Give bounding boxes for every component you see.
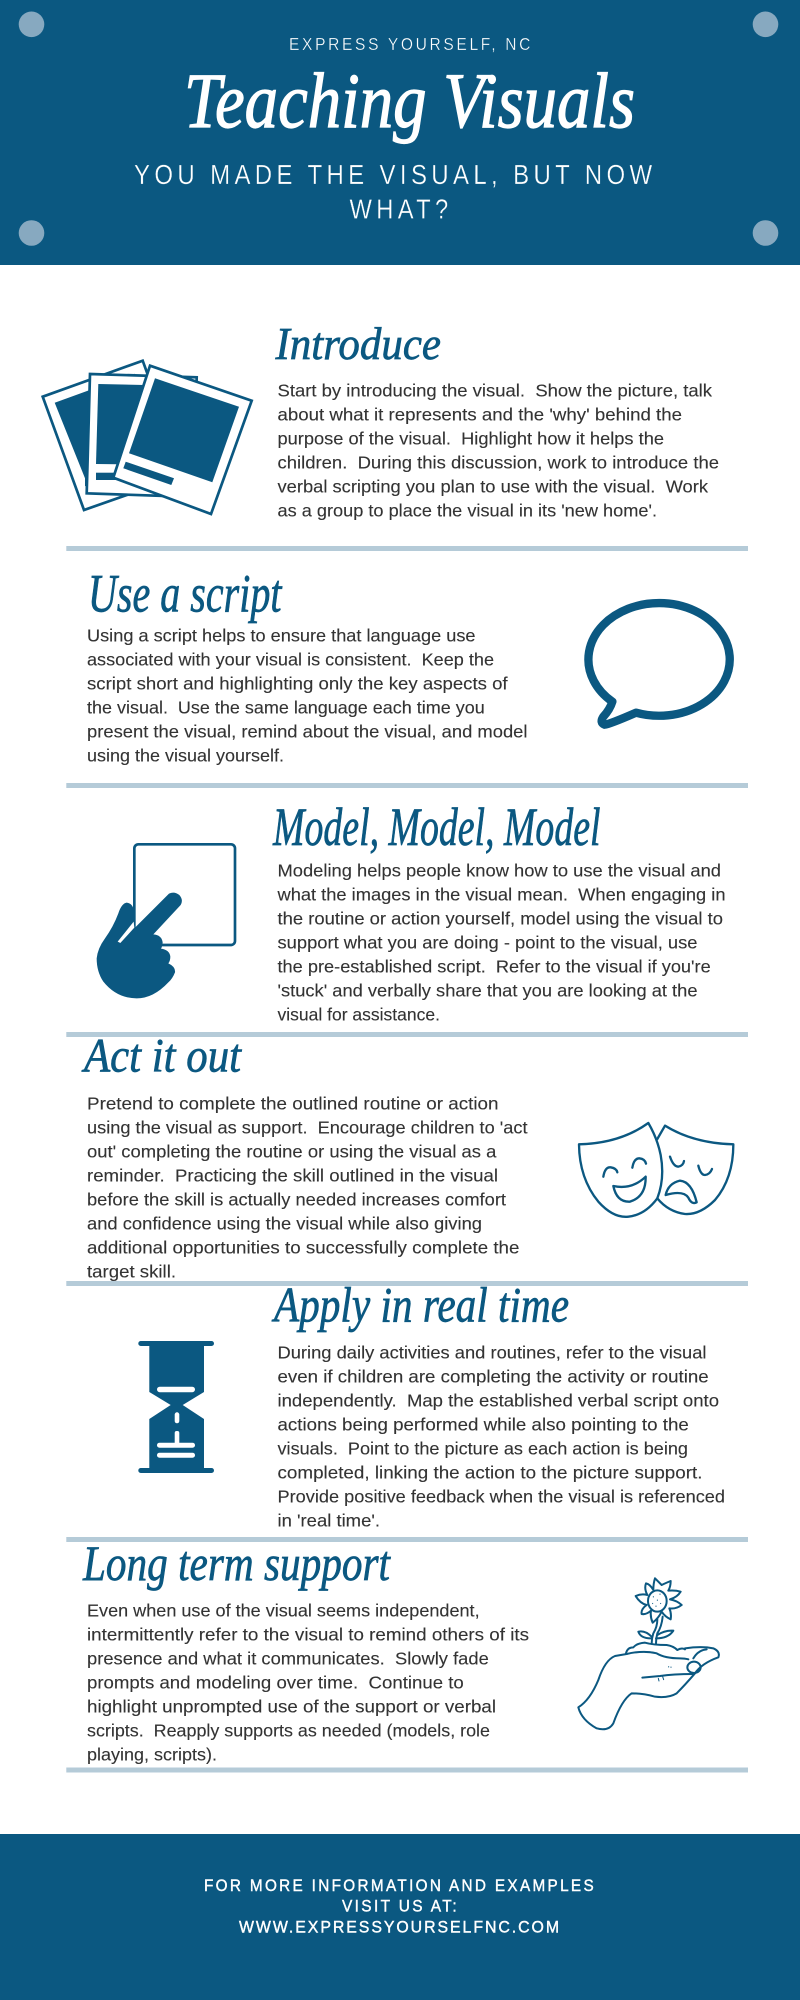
text block: model: visual for assistance. (278, 1004, 440, 1024)
text block: introduce: verbal scripting you plan to use with the visual. Work (278, 477, 708, 497)
text block: apply in real time: independently. Map the established verbal script onto (278, 1390, 719, 1410)
text block: apply in real time: even if children are completing the activity or routine (278, 1366, 709, 1386)
title: Teaching Visuals (184, 57, 635, 144)
text block: act it out: using the visual as support. Encourage children to 'act (87, 1117, 528, 1137)
text block: act it out: Pretend to complete the outlined routine or action (87, 1093, 498, 1113)
text block: use a script: script short and highlighting only the key aspects of (87, 674, 508, 694)
footer text: WWW.EXPRESSYOURSELFNC.COM (239, 1919, 561, 1937)
text block: apply in real time: in 'real time'. (278, 1510, 380, 1530)
text block: introduce: as a group to place the visual in its 'new home'. (278, 501, 657, 521)
footer text (204, 1877, 596, 1937)
icon: hourglass (138, 1341, 214, 1473)
panel: footer (0, 1834, 800, 2000)
heading: long term support: Long term support (82, 1535, 391, 1591)
icon: hand holding flower (578, 1578, 719, 1729)
text block: long term support: scripts. Reapply supports as needed (models, role (87, 1720, 490, 1740)
icon: speech bubble (588, 603, 730, 725)
text block: apply in real time (278, 1342, 725, 1530)
text block: long term support: Even when use of the visual seems independent, (87, 1600, 480, 1620)
text block: apply in real time: visuals. Point to the picture as each action is being (278, 1438, 688, 1458)
text block: long term support (87, 1600, 529, 1764)
panel: long term support (82, 1535, 719, 1764)
text block: model: the routine or action yourself, model using the visual to (278, 908, 723, 928)
text block: use a script: present the visual, remind about the visual, and model (87, 722, 528, 742)
text block: introduce: Start by introducing the visual. Show the picture, talk (278, 380, 712, 400)
heading: introduce: Introduce (275, 318, 441, 369)
panel: apply in real time (138, 1277, 725, 1530)
text block: model: 'stuck' and verbally share that you are looking at the (278, 980, 698, 1000)
text block: apply in real time: Provide positive feedback when the visual is referenced (278, 1486, 725, 1506)
heading: apply in real time: Apply in real time (272, 1277, 569, 1333)
footer text: VISIT US AT: (342, 1898, 459, 1916)
text block: apply in real time: completed, linking the action to the picture support. (278, 1462, 702, 1482)
text block: use a script: the visual. Use the same language each time you (87, 698, 485, 718)
panel: act it out (81, 1030, 733, 1281)
text block: model: the pre-established script. Refer to the visual if you're (278, 956, 711, 976)
text block: long term support: presence and what it communicates. Slowly fade (87, 1648, 489, 1668)
icon: theatre masks (579, 1123, 733, 1217)
text block: act it out: target skill. (87, 1261, 176, 1281)
panel: use a script (87, 564, 730, 766)
subtitle (134, 159, 656, 225)
text block: long term support: playing, scripts). (87, 1744, 217, 1764)
text block: introduce: purpose of the visual. Highlight how it helps the (278, 429, 664, 449)
organisation name: EXPRESS YOURSELF, NC (289, 34, 533, 54)
heading: act it out: Act it out (81, 1030, 242, 1083)
text block: act it out: additional opportunities to successfully complete the (87, 1237, 519, 1257)
panel: introduce (43, 318, 719, 521)
icon: stack of photos (43, 361, 252, 514)
text block: apply in real time: actions being performed while also pointing to the (278, 1414, 689, 1434)
panel: model (97, 797, 725, 1024)
text block: long term support: prompts and modeling over time. Continue to (87, 1672, 464, 1692)
text block: long term support: intermittently refer to the visual to remind others of its (87, 1624, 529, 1644)
text block: act it out (87, 1093, 528, 1281)
text block: introduce (278, 380, 719, 521)
text block: introduce: children. During this discussion, work to introduce the (278, 453, 719, 473)
panel: header (0, 0, 800, 265)
heading: model: Model, Model, Model (272, 797, 600, 857)
text block: model (276, 860, 726, 1024)
text block: act it out: reminder. Practicing the skill outlined in the visual (87, 1165, 498, 1185)
text block: act it out: out' completing the routine or using the visual as a (87, 1141, 497, 1161)
text block: act it out: before the skill is actually needed increases comfort (87, 1189, 506, 1209)
text block: use a script: Using a script helps to ensure that language use (87, 626, 476, 646)
text block: model: support what you are doing - point to the visual, use (278, 932, 698, 952)
text block: use a script: associated with your visual is consistent. Keep the (87, 650, 494, 670)
text block: introduce: about what it represents and the 'why' behind the (278, 404, 682, 424)
heading: use a script: Use a script (88, 564, 283, 624)
text block: model: Modeling helps people know how to use the visual and (278, 860, 721, 880)
icon: hand pointing at card (97, 844, 235, 998)
text block: use a script: using the visual yourself. (87, 746, 284, 766)
text block: use a script (87, 626, 528, 766)
footer text: FOR MORE INFORMATION AND EXAMPLES (204, 1877, 596, 1895)
text block: apply in real time: During daily activities and routines, refer to the visual (278, 1342, 706, 1362)
text block: long term support: highlight unprompted use of the support or verbal (87, 1696, 496, 1716)
subtitle: WHAT? (350, 194, 452, 225)
text block: model: what the images in the visual mean. When engaging in (276, 884, 726, 904)
text block: act it out: and confidence using the visual while also giving (87, 1213, 482, 1233)
subtitle: YOU MADE THE VISUAL, BUT NOW (134, 159, 656, 190)
